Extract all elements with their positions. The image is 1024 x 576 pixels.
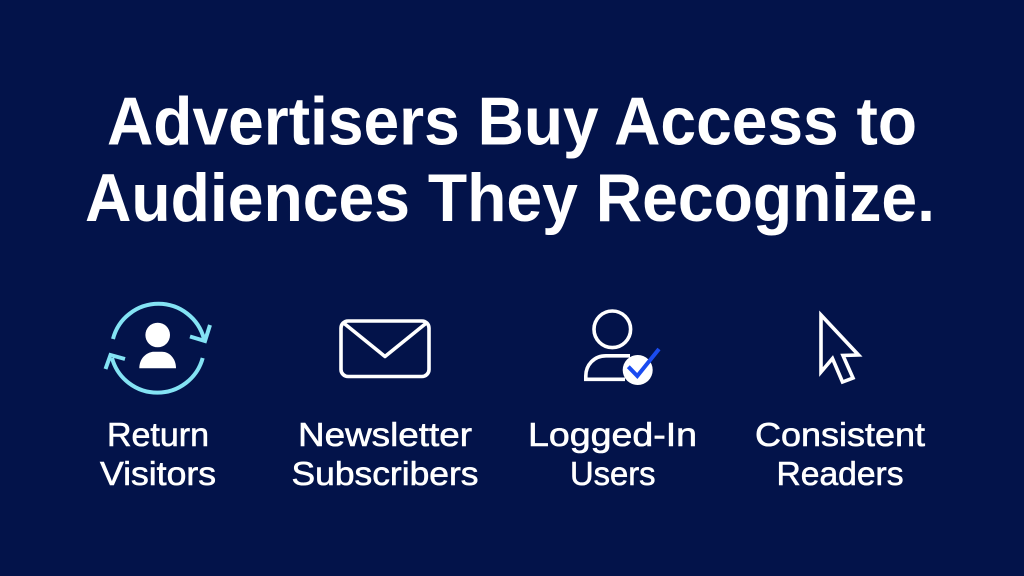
- label: return visitors: Return: [107, 416, 209, 453]
- item: consistent readers: [755, 315, 925, 492]
- icon: envelope: [341, 321, 429, 376]
- icon: user with check: [586, 311, 659, 385]
- label: logged-in users: Users: [570, 455, 656, 492]
- label: newsletter subscribers: Subscribers: [292, 455, 478, 492]
- label: consistent readers: [755, 416, 925, 492]
- label: consistent readers: Consistent: [755, 416, 925, 453]
- title: [85, 83, 935, 236]
- label: logged-in users: Logged-In: [528, 416, 697, 453]
- item: logged-in users: [528, 311, 697, 492]
- label: newsletter subscribers: [292, 416, 478, 492]
- item: return visitors: [100, 304, 216, 492]
- label: return visitors: Visitors: [100, 455, 216, 492]
- label: logged-in users: [528, 416, 697, 492]
- label: return visitors: [100, 416, 216, 492]
- label: consistent readers: Readers: [776, 455, 904, 492]
- icon: cursor: [821, 315, 858, 382]
- icon: return arrows around person: [106, 304, 210, 393]
- item: newsletter subscribers: [292, 321, 478, 492]
- label: newsletter subscribers: Newsletter: [298, 416, 472, 453]
- title: Audiences They Recognize.: [85, 160, 935, 236]
- title: Advertisers Buy Access to: [107, 83, 917, 159]
